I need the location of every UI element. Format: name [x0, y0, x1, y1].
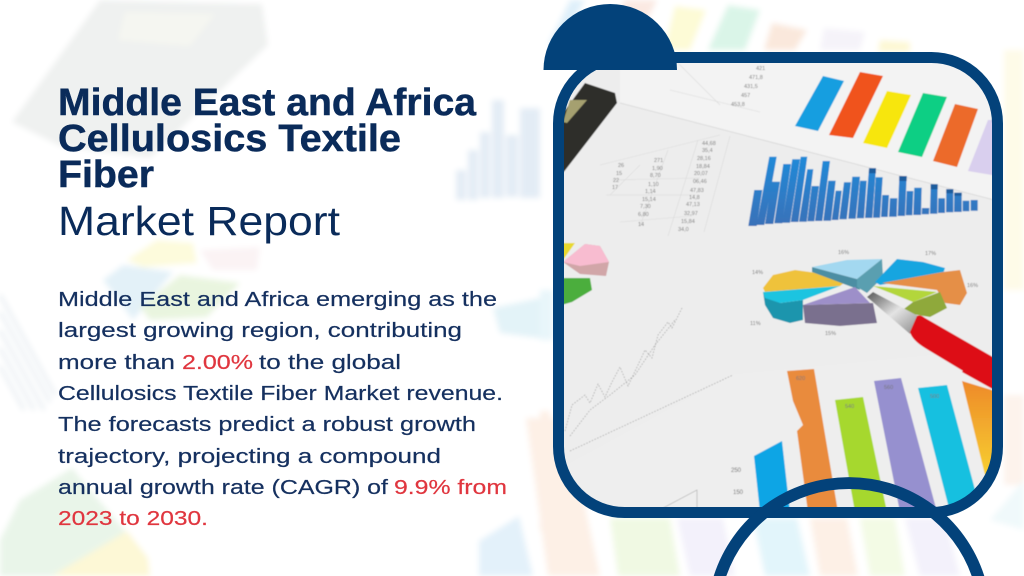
data tables: 1,10: [648, 182, 659, 188]
lower bar chart: 500: [930, 394, 939, 400]
data tables: 15,84: [681, 219, 695, 225]
paper sheets: [558, 58, 998, 520]
data tables: 271: [654, 158, 663, 164]
body paragraph: The forecasts predict a robust growth: [58, 413, 476, 436]
pie percentage labels: 17%: [925, 251, 936, 257]
bottom ring: [714, 477, 984, 576]
data tables: 457: [741, 93, 750, 99]
title: Middle East and Africa: [58, 82, 477, 124]
background: bottom bars: [479, 290, 960, 576]
background: top colour bars: [548, 0, 910, 52]
data tables: 431,5: [744, 84, 758, 90]
data tables: 421: [756, 66, 765, 72]
data tables: 15,14: [642, 197, 656, 203]
data tables: 44,68: [702, 141, 716, 147]
body paragraph: Cellulosics Textile Fiber Market revenue.: [58, 382, 503, 405]
red pen: [866, 292, 992, 372]
pie percentage labels: 16%: [838, 250, 849, 256]
blue histogram: [748, 157, 978, 226]
highlight: 2.00%: 2.00%: [182, 351, 253, 374]
title: Fiber: [58, 154, 154, 196]
data tables: 28,16: [697, 156, 711, 162]
lower bar chart: 620: [796, 376, 805, 382]
pie percentage labels: 16%: [967, 283, 978, 289]
coloured 3D bars: [795, 72, 998, 176]
top semicircle: [544, 4, 677, 70]
data tables: 26: [618, 163, 624, 169]
data tables: 35,4: [702, 148, 713, 154]
lower bar chart: 250: [731, 468, 742, 474]
data tables: 471,8: [749, 75, 763, 81]
data tables: [600, 62, 765, 236]
pie percentage labels: 11%: [750, 321, 761, 327]
data tables: 15: [616, 171, 622, 177]
line chart with dots: [565, 308, 733, 451]
subtitle: Market Report: [58, 198, 341, 244]
photo panel: [558, 58, 998, 520]
background: diagonal stripes: [0, 295, 55, 410]
background: histogram: [456, 100, 540, 200]
body paragraph: largest growing region, contributing: [58, 319, 462, 342]
data tables: 14: [638, 222, 644, 228]
data tables: 06,46: [693, 179, 707, 185]
background: pie blobs: [103, 240, 553, 340]
pie percentage labels: [750, 250, 978, 337]
background: green and yellow shapes: [0, 468, 150, 576]
data tables: 14,8: [689, 195, 700, 201]
lower bar chart: 540: [845, 404, 854, 410]
highlight: 9.9% from: 9.9% from: [394, 476, 507, 499]
pie fragments at left: [564, 242, 610, 305]
data tables: 18,84: [696, 164, 710, 170]
data tables: 32,97: [684, 211, 698, 217]
data tables: 1,90: [652, 166, 663, 172]
title: Cellulosics Textile: [58, 118, 401, 160]
body paragraph: [58, 288, 507, 530]
background: right side tints: [994, 49, 1024, 528]
highlight: 2023 to 2030: 2023 to 2030.: [58, 507, 208, 530]
lower bar chart: 150: [733, 490, 744, 496]
calculator: [558, 83, 617, 173]
data tables: 47,13: [686, 202, 700, 208]
data tables: 20,07: [694, 171, 708, 177]
data tables: 6,80: [638, 212, 649, 218]
lower bar chart: 560: [884, 385, 893, 391]
data tables: 8,70: [650, 173, 661, 179]
body paragraph: Middle East and Africa emerging as the: [58, 288, 497, 311]
data tables: 1,14: [645, 189, 656, 195]
data tables: 17: [612, 185, 618, 191]
background: calculator: [12, 0, 268, 158]
body paragraph: annual growth rate (CAGR) of: [58, 476, 388, 499]
data tables: 453,8: [731, 102, 745, 108]
pie percentage labels: 14%: [752, 270, 763, 276]
photo frame: [558, 58, 998, 512]
data tables: 7,30: [640, 204, 651, 210]
body paragraph: more than: [58, 351, 175, 374]
data tables: 34,0: [678, 227, 689, 233]
data tables: 22: [613, 178, 619, 184]
data tables: 47,83: [690, 188, 704, 194]
3D pie chart: [763, 259, 967, 326]
pie percentage labels: 15%: [825, 331, 836, 337]
body paragraph: trajectory, projecting a compound: [58, 445, 441, 468]
body paragraph: to the global: [259, 351, 401, 374]
lower bar chart: [664, 368, 992, 507]
title: [58, 82, 477, 196]
